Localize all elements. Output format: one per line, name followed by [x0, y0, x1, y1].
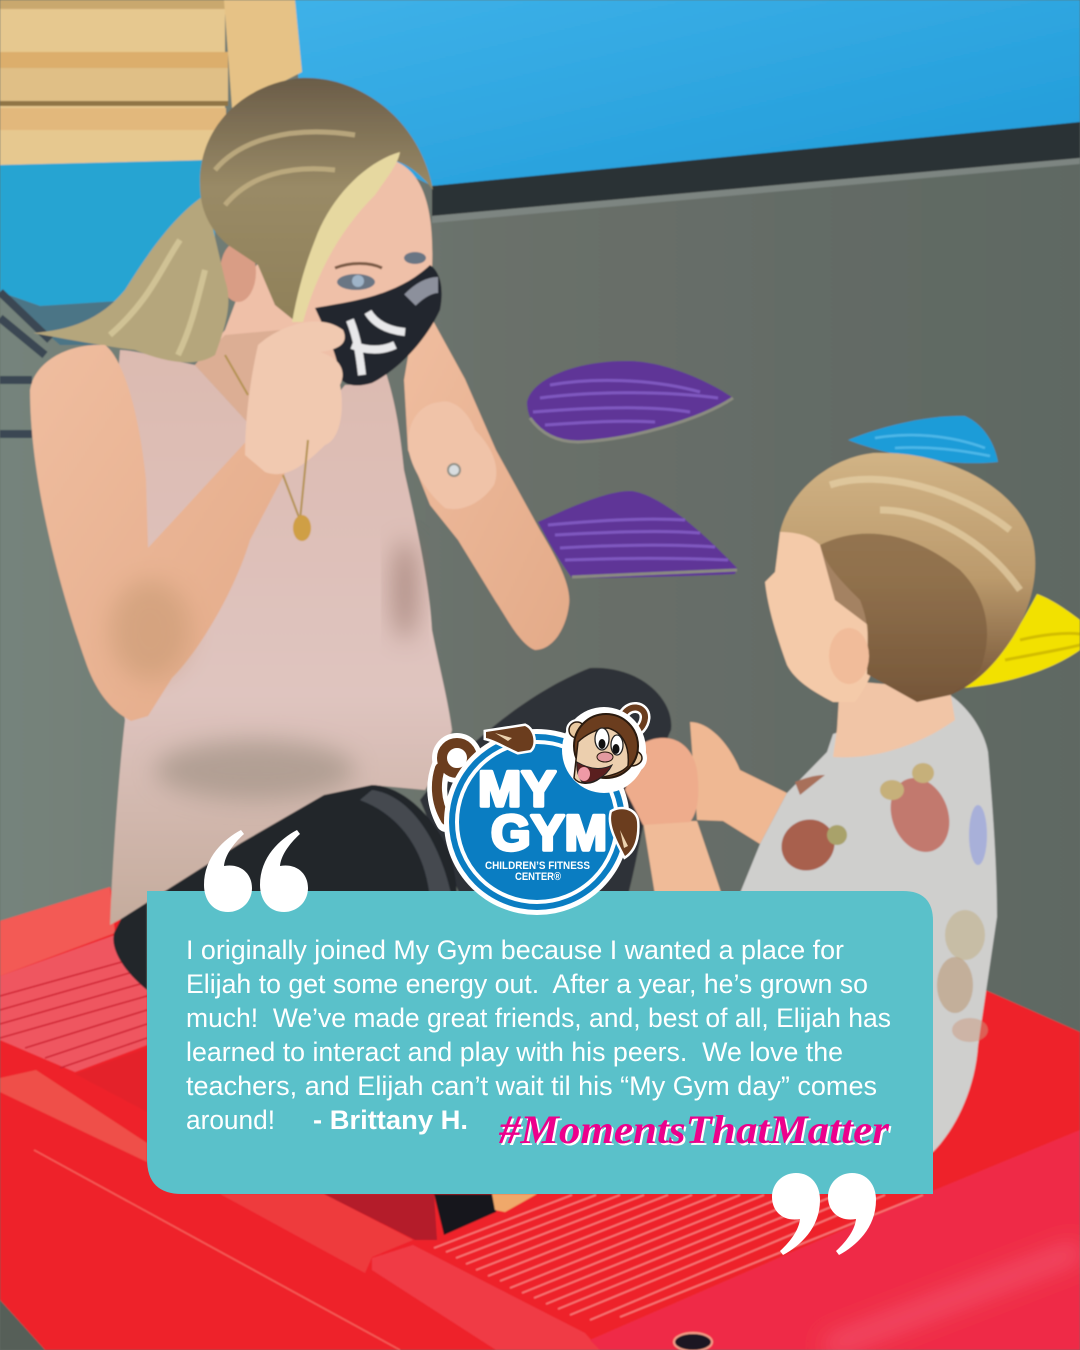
woman: foot [434, 1194, 537, 1235]
boy: shirt [740, 695, 997, 1152]
testimonial text: Elijah to get some energy out. After a year, he’s grown so [186, 969, 868, 999]
gym bars [0, 292, 50, 434]
blue wall [295, 0, 1080, 186]
boy: front forearm [643, 821, 722, 895]
woman: far arm [404, 317, 569, 650]
logo: monkey tail [432, 733, 482, 822]
icon: opening quote mark [204, 830, 308, 912]
testimonial text: learned to interact and play with his peers. We love the [186, 1037, 843, 1067]
blue stepping stone [848, 416, 998, 463]
woman: pendant [225, 355, 311, 541]
boy: shirt koalas [772, 763, 988, 1042]
woman: neck and face [195, 158, 432, 440]
boy [625, 453, 1035, 1152]
boy: back arm and hand [690, 722, 787, 844]
purple stepping stone front [538, 491, 737, 578]
woman: near arm [30, 345, 285, 721]
purple stepping stone back [527, 361, 733, 442]
quote panel [147, 891, 933, 1194]
woman: tie-dye mask [315, 265, 442, 385]
woman: hair [200, 78, 433, 322]
boy: clasped hands [625, 738, 698, 825]
yellow stepping stone [963, 594, 1080, 688]
woman: eyes [335, 252, 426, 290]
testimonial text: around! [186, 1105, 275, 1135]
woman: ponytail [33, 195, 228, 362]
logo: tagline [485, 860, 590, 883]
testimonial text: teachers, and Elijah can’t wait til his “My Gym day” comes [186, 1071, 877, 1101]
woman: hand at mask [245, 321, 345, 474]
logo: wordmark [478, 761, 607, 861]
hashtag: #MomentsThatMatter [500, 1109, 891, 1154]
woman: blonde streak [292, 152, 400, 322]
attribution: - Brittany H. [313, 1105, 468, 1135]
boy: hair [780, 453, 1035, 702]
logo: tagline: CENTER® [515, 871, 561, 883]
woman: clasped hand [408, 401, 496, 509]
woman: ring [448, 464, 460, 476]
boy: face [765, 518, 884, 702]
woman: far leggings knee [420, 668, 671, 895]
woman: near leggings [113, 785, 457, 990]
logo: tagline: CHILDREN’S FITNESS [485, 860, 590, 872]
red play mat [0, 887, 1080, 1350]
logo: wordmark: MY [478, 761, 556, 817]
testimonial text: I originally joined My Gym because I wanted a place for [186, 935, 844, 965]
logo: monkey hand right [611, 809, 637, 856]
woman [30, 78, 671, 1235]
logo: circle badge [444, 729, 630, 915]
testimonial text [186, 935, 891, 1135]
logo: My Gym [432, 707, 647, 915]
icon: closing quote mark [772, 1173, 876, 1255]
wooden climber [0, 0, 302, 165]
logo: monkey head [562, 707, 647, 793]
boy: neck [833, 680, 955, 757]
testimonial text: much! We’ve made great friends, and, best of all, Elijah has [186, 1003, 891, 1033]
woman: pink tank top [100, 350, 452, 925]
woman: ear [220, 242, 256, 302]
logo: wordmark: GYM [491, 805, 607, 861]
dark baseboard [432, 122, 1080, 216]
hashtag: #MomentsThatMatter [498, 1107, 889, 1152]
boy: ear [829, 628, 869, 684]
blue floor mat [0, 150, 215, 306]
logo: monkey hand top [486, 726, 533, 752]
